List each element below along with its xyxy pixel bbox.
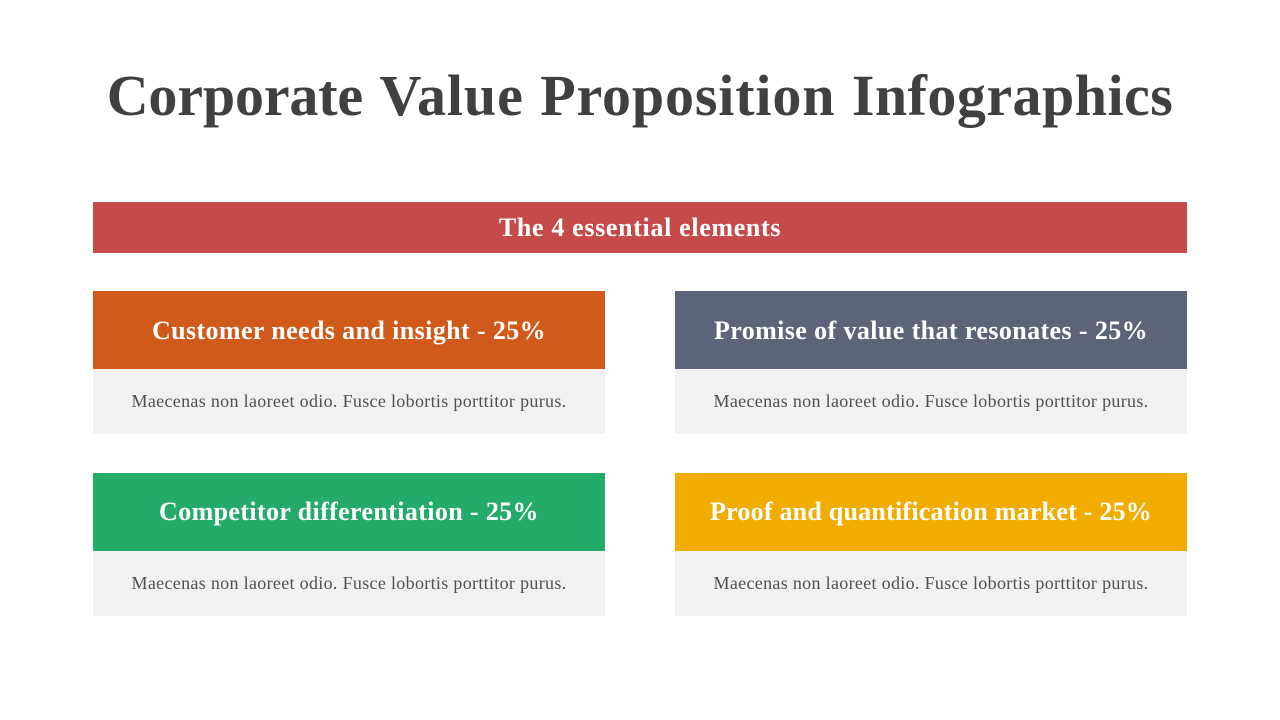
text: promise of value description <box>675 369 1187 434</box>
text: customer needs description: Maecenas non laoreet odio. Fusce lobortis porttitor purus. <box>132 391 566 411</box>
text: promise of value description: Maecenas non laoreet odio. Fusce lobortis porttitor purus. <box>714 391 1148 411</box>
panel: competitor differentiation <box>93 473 605 616</box>
text: competitor differentiation description: Maecenas non laoreet odio. Fusce lobortis porttitor purus. <box>132 573 566 593</box>
heading: promise of value <box>675 291 1187 369</box>
title: Corporate Value Proposition Infographics <box>107 62 1173 128</box>
banner: the 4 essential elements <box>93 202 1187 253</box>
heading: proof and quantification <box>675 473 1187 551</box>
banner: the 4 essential elements: The 4 essential elements <box>499 212 781 242</box>
text: proof and quantification description <box>675 551 1187 616</box>
panel: customer needs <box>93 291 605 434</box>
panel: promise of value <box>675 291 1187 434</box>
text: proof and quantification description: Maecenas non laoreet odio. Fusce lobortis porttitor purus. <box>714 573 1148 593</box>
heading: proof and quantification: Proof and quantification market - 25% <box>710 496 1152 526</box>
text: customer needs description <box>93 369 605 434</box>
heading: competitor differentiation <box>93 473 605 551</box>
heading: promise of value: Promise of value that resonates - 25% <box>714 316 1148 344</box>
text: competitor differentiation description <box>93 551 605 616</box>
heading: customer needs: Customer needs and insight - 25% <box>152 316 546 344</box>
heading: competitor differentiation: Competitor differentiation - 25% <box>159 496 539 526</box>
heading: customer needs <box>93 291 605 369</box>
panel: proof and quantification <box>675 473 1187 616</box>
